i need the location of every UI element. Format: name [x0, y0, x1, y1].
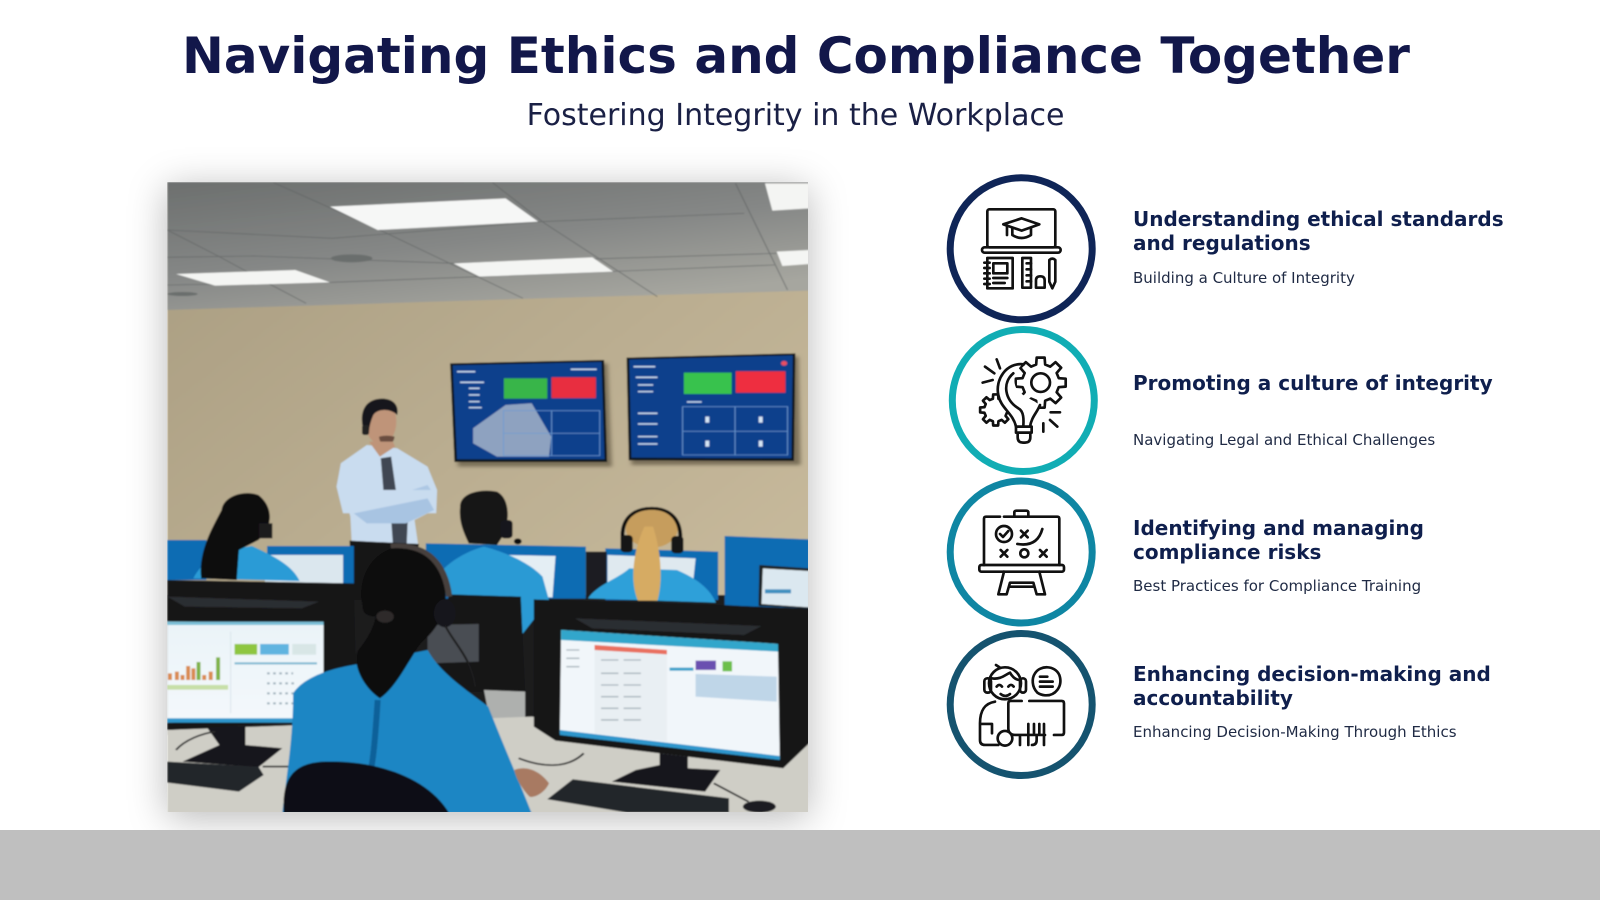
centre small monitor: [428, 594, 525, 757]
heading: accountability: [1133, 686, 1293, 710]
keyboard left: [167, 762, 264, 792]
foreground woman: [282, 546, 549, 813]
subheading: Navigating Legal and Ethical Challenges: [1133, 431, 1435, 449]
heading: Promoting a culture of integrity: [1133, 371, 1493, 395]
back row person 3: [588, 508, 716, 603]
desk: [167, 717, 809, 813]
subheading: Building a Culture of Integrity: [1133, 269, 1355, 287]
heading: [1133, 516, 1424, 564]
left monitor: [167, 580, 356, 767]
back row person 2: [443, 491, 549, 633]
cables: [176, 732, 749, 802]
back row monitors: [167, 536, 809, 610]
footer band: [0, 830, 1600, 900]
list item 4: [946, 630, 1491, 779]
list item 3: [946, 478, 1424, 626]
icon: lightbulb with gears: [948, 326, 1098, 475]
right monitor stand: [612, 753, 720, 792]
heading: compliance risks: [1133, 540, 1321, 564]
chair: [283, 762, 449, 813]
icon: support agent at computer: [946, 630, 1096, 779]
list item 1: [946, 174, 1504, 324]
wall screen right: [627, 353, 795, 461]
lower scene: [167, 490, 809, 813]
icon: strategy board on easel: [946, 478, 1096, 626]
subtitle: Fostering Integrity in the Workplace: [527, 98, 1064, 133]
photo: compliance training room: [167, 182, 808, 812]
heading: [1133, 207, 1504, 255]
wall screen left: [450, 360, 607, 462]
man: standing trainer: [336, 399, 437, 513]
heading: Identifying and managing: [1133, 516, 1424, 540]
heading: [1133, 662, 1491, 710]
heading: and regulations: [1133, 231, 1311, 255]
icon: laptop, cap and stationery: [946, 174, 1096, 324]
heading: Understanding ethical standards: [1133, 207, 1504, 231]
heading: Enhancing decision-making and: [1133, 662, 1491, 686]
back row person 1: [193, 493, 300, 581]
right monitor: [534, 599, 809, 768]
upper scene: [167, 182, 809, 682]
list item 2: [948, 326, 1493, 475]
mouse and keyboard right: [547, 779, 776, 813]
subheading: Enhancing Decision-Making Through Ethics: [1133, 722, 1457, 740]
title: Navigating Ethics and Compliance Together: [182, 27, 1410, 85]
subheading: Best Practices for Compliance Training: [1133, 576, 1421, 594]
